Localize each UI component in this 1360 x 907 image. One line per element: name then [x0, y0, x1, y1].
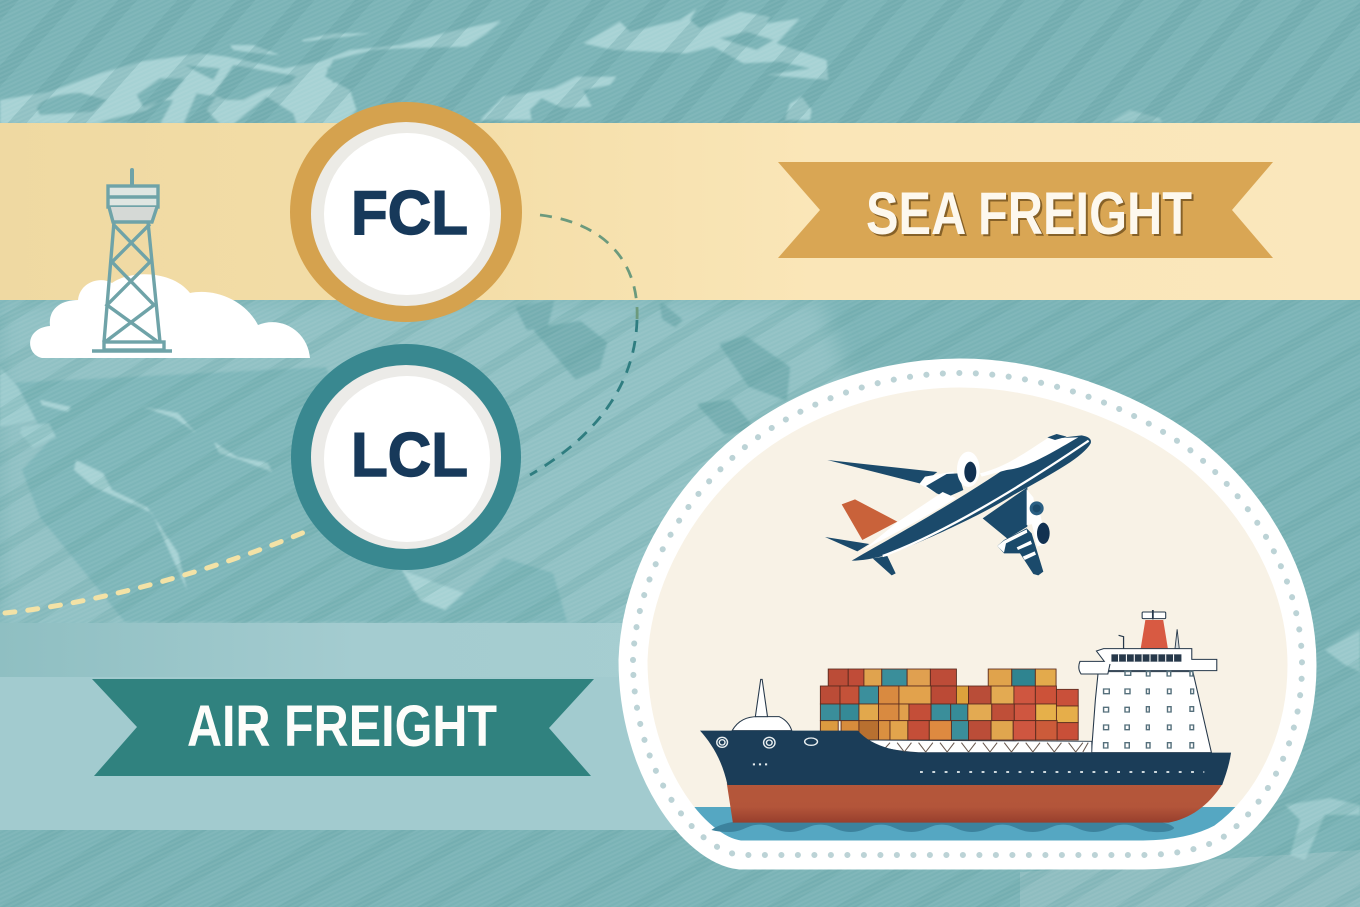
- sea: [694, 807, 1236, 840]
- hull upper navy: [700, 731, 1231, 785]
- land: northern continent left: [0, 21, 502, 124]
- bridge deck: [1079, 649, 1217, 674]
- hull waves shadow: [711, 821, 1174, 832]
- fuselage white stripe: [883, 441, 1089, 556]
- cloud with lookout tower: [30, 170, 310, 358]
- far wing: [827, 460, 937, 484]
- funnel: [1141, 620, 1168, 648]
- masts: [1119, 635, 1124, 649]
- superstructure: [1079, 610, 1217, 753]
- portholes: [717, 737, 817, 748]
- engines and gear: [1027, 489, 1050, 547]
- hull lights: [753, 761, 768, 767]
- fuselage white upper: [863, 492, 956, 550]
- tower: [92, 170, 172, 351]
- route: yellow dashed line: [5, 531, 307, 613]
- land: pale coast strips: [40, 400, 464, 610]
- far wing root: [919, 472, 957, 493]
- LCL badge: [291, 344, 521, 570]
- land: left dark continent: [9, 367, 567, 622]
- sea freight ribbon: [778, 162, 1273, 258]
- bow dome and mast: [732, 679, 792, 731]
- near wing: [983, 487, 1027, 539]
- cloud: [30, 274, 310, 358]
- container ship: [700, 610, 1231, 832]
- route: dashed curve FCL to LCL: [530, 215, 637, 475]
- pale lower band: [0, 623, 720, 830]
- airplane: [825, 434, 1091, 575]
- bridge windows: [1111, 654, 1181, 662]
- fuselage: [852, 435, 1091, 561]
- land: far east light: [1110, 110, 1162, 122]
- air freight ribbon: [92, 679, 594, 776]
- bubble dotted line: [633, 373, 1302, 855]
- bubble interior: [633, 373, 1302, 855]
- air freight label: AIR FREIGHT: [187, 694, 497, 759]
- FCL badge: [290, 102, 522, 322]
- horizontal stabilizers: [825, 537, 896, 575]
- sea freight label: SEA FREIGHT: [868, 182, 1194, 249]
- tail fin: [842, 499, 897, 540]
- land: central dark islands: [518, 302, 788, 432]
- sand band: [0, 123, 1360, 300]
- cockpit: [1047, 434, 1067, 440]
- engine near: [957, 452, 980, 487]
- illustration bubble: [620, 373, 1320, 857]
- cabin windows: [1104, 671, 1194, 748]
- land: right light patches: [1285, 630, 1360, 860]
- deck railing: [861, 740, 1092, 753]
- FCL label: FCL: [351, 179, 468, 248]
- sea freight ribbon: SEA FREIGHT: [866, 180, 1192, 247]
- containers: [820, 669, 1078, 740]
- accommodation block: [1091, 672, 1211, 753]
- LCL label: LCL: [351, 421, 468, 490]
- hull lower red: [727, 783, 1223, 823]
- bubble white ring: [633, 373, 1302, 855]
- land: north-east continent and islands: [480, 8, 828, 120]
